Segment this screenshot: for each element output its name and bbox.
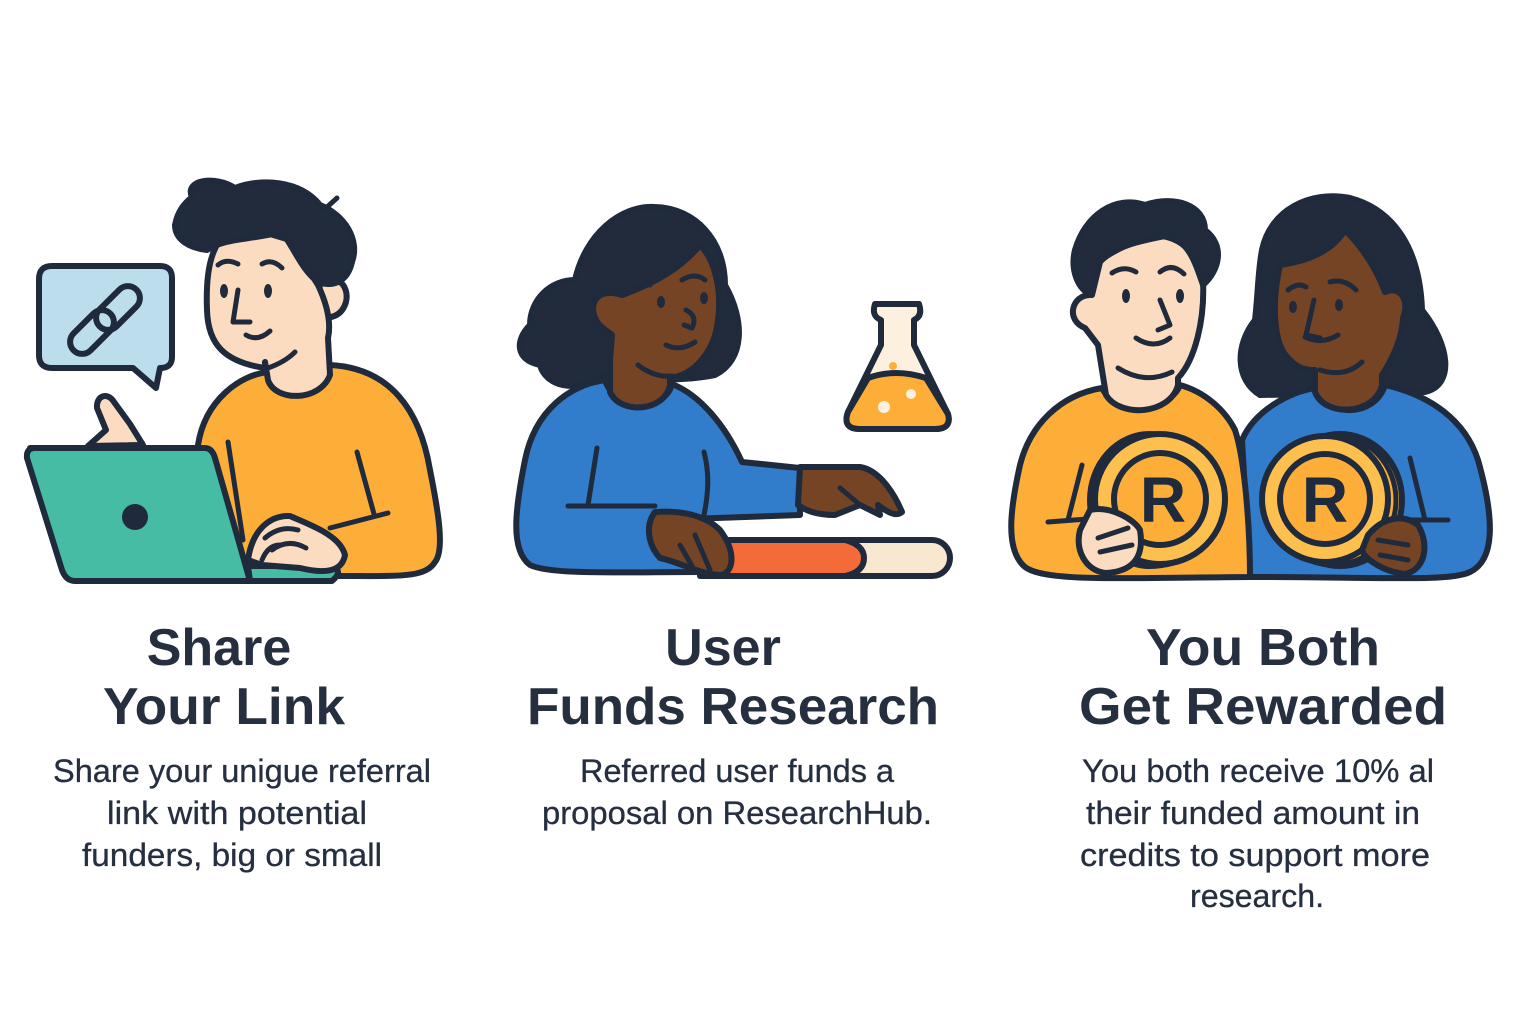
man's ear [318, 279, 347, 317]
woman's face features [625, 276, 705, 376]
man's torso [198, 365, 440, 576]
panel: user funds research [516, 207, 950, 831]
woman's hands [649, 467, 902, 575]
right coin: R [1302, 464, 1348, 536]
sweater lines [1048, 458, 1448, 522]
speech bubble with link icon [39, 266, 172, 388]
laptop [27, 448, 338, 581]
description: You both receive 10% al [1082, 753, 1434, 789]
left coin: R [1140, 464, 1186, 536]
heading: Funds Research [527, 678, 939, 736]
woman's hair [1241, 196, 1445, 395]
heading [103, 619, 345, 736]
panel: you both get rewarded [1011, 196, 1490, 914]
illustration: woman with flask [516, 207, 950, 576]
right coin [1262, 434, 1402, 566]
heading: Your Link [103, 678, 345, 736]
description: funders, big or small [82, 837, 382, 873]
man's neck and face [207, 225, 330, 396]
man's neck and face [1073, 235, 1203, 410]
description: Share your unigue referral [53, 753, 431, 789]
description: their funded amount in [1086, 795, 1420, 831]
pointing hand [88, 396, 143, 446]
heading [1079, 619, 1447, 736]
heading: User [665, 619, 781, 677]
sweater lines [568, 448, 708, 515]
heading: Get Rewarded [1079, 678, 1447, 736]
description: research. [1190, 878, 1324, 914]
description [542, 753, 932, 831]
left coin [1090, 434, 1225, 566]
description: credits to support more [1080, 837, 1430, 873]
man's torso [1011, 385, 1250, 578]
panel: share your link [27, 181, 440, 873]
heading: You Both [1146, 619, 1380, 677]
illustration: two people with coins [1011, 196, 1490, 578]
woman's neck and face [1275, 230, 1405, 410]
woman's neck and face [593, 245, 719, 407]
description [1080, 753, 1434, 914]
illustration: man with laptop [27, 181, 440, 581]
woman's hair [520, 207, 739, 386]
sweater and arm lines [228, 442, 388, 540]
woman's torso [1242, 385, 1490, 578]
typing hand [248, 516, 345, 571]
description: Referred user funds a [580, 753, 894, 789]
woman's torso and arm [516, 380, 800, 572]
heading: Share [147, 619, 291, 677]
man's hair [175, 181, 354, 284]
flask [846, 304, 949, 429]
heading [527, 619, 939, 736]
man's hand [1079, 509, 1141, 573]
man's face features [1112, 267, 1184, 378]
description: proposal on ResearchHub. [542, 795, 932, 831]
description: link with potential [107, 795, 367, 831]
hair tick [326, 198, 337, 208]
woman's face features [1288, 281, 1362, 373]
man's face features [218, 261, 295, 368]
description [53, 753, 431, 873]
woman's hand [1362, 518, 1424, 574]
progress bar [700, 540, 950, 576]
man's hair [1074, 201, 1218, 295]
